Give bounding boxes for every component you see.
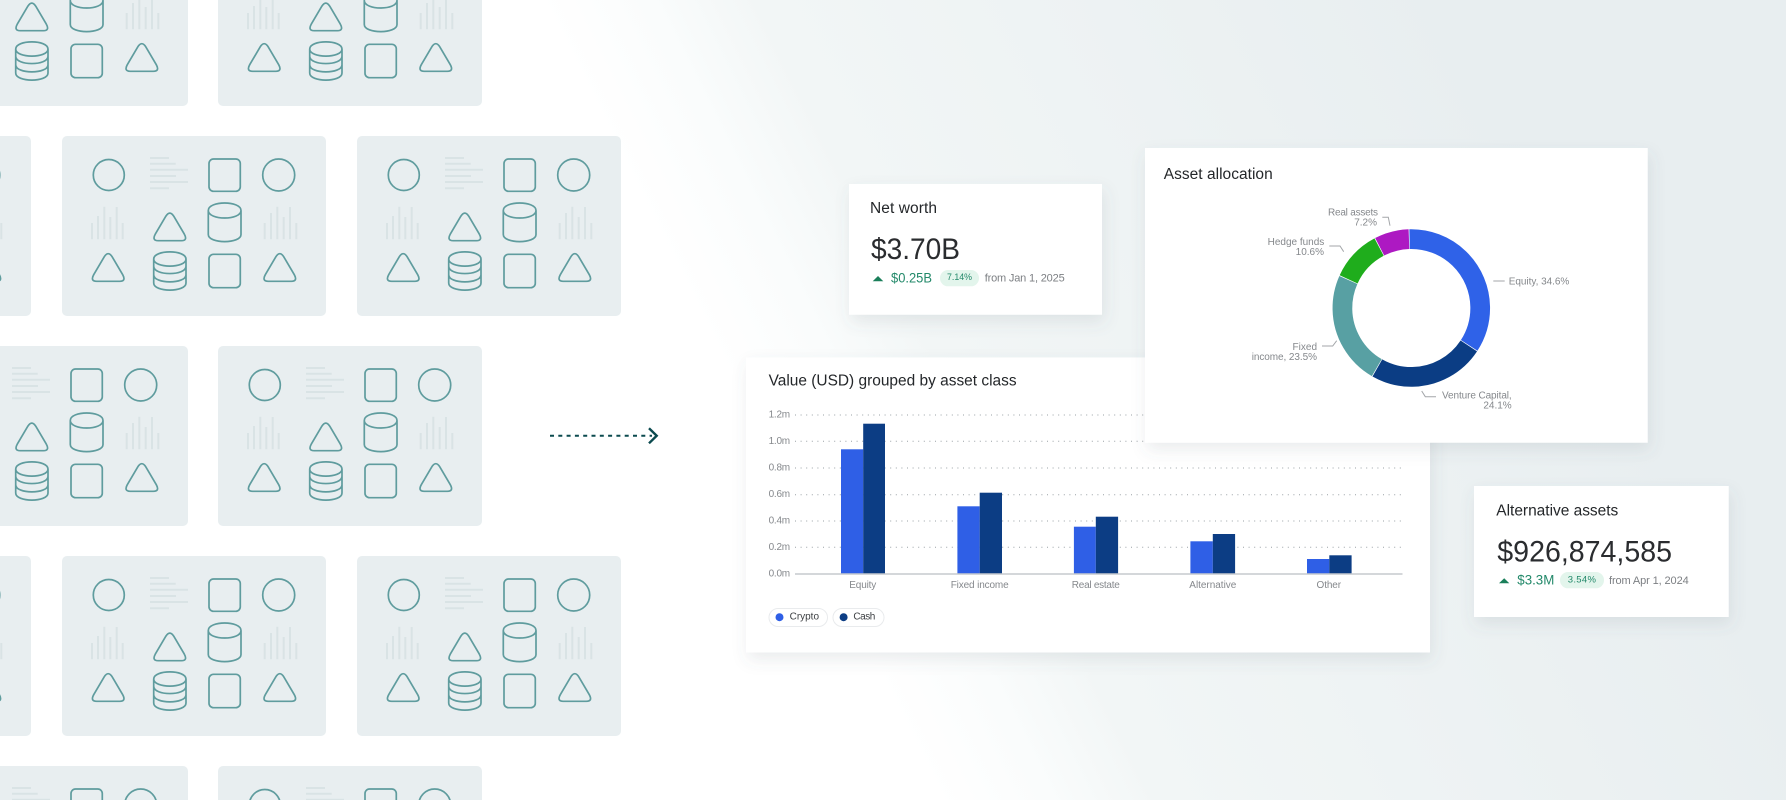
panel: value by asset class bar chart	[746, 358, 1430, 652]
tile: row 4 centre	[62, 556, 326, 736]
tile: row 3 right	[218, 346, 482, 526]
panel: grid of source data tiles	[0, 0, 621, 800]
change indicator: from Jan 1, 2025	[985, 273, 1065, 285]
x axis labels: Real estate	[1072, 580, 1120, 591]
change indicator: $0.25B	[891, 270, 932, 285]
heading: net worth: Net worth	[870, 200, 937, 217]
chart: grouped bars	[769, 410, 1402, 591]
change indicator: from Apr 1, 2024	[1609, 575, 1689, 587]
tile: row 1 left	[0, 0, 188, 106]
x axis labels: Other	[1317, 580, 1342, 591]
x axis labels	[849, 580, 1342, 591]
change indicator	[1499, 572, 1689, 588]
grid lines	[795, 415, 1402, 547]
y axis labels: 0.6m	[769, 489, 790, 500]
donut labels: Venture Capital,	[1442, 391, 1512, 402]
tile: row 2 cut off	[0, 136, 31, 316]
tile: row 2 centre	[62, 136, 326, 316]
panel: net worth card	[849, 184, 1102, 315]
heading: bar chart title: Value (USD) grouped by asset class	[769, 373, 1017, 390]
tile: row 1 right	[218, 0, 482, 106]
donut labels: Real assets	[1328, 208, 1378, 219]
change indicator: $3.3M	[1517, 573, 1554, 588]
tile: row 5 left	[0, 766, 188, 800]
donut labels: Equity, 34.6%	[1509, 277, 1569, 288]
y axis labels: 0.0m	[769, 568, 790, 580]
tile: row 4 cut off	[0, 556, 31, 736]
legend: crypto and cash	[769, 608, 884, 626]
legend: crypto and cash: Crypto	[790, 612, 819, 623]
panel: alternative assets card	[1474, 486, 1729, 617]
tile: row 3 left	[0, 346, 188, 526]
donut labels: 24.1%	[1483, 401, 1512, 412]
y axis labels: 1.2m	[769, 410, 790, 420]
donut labels: Hedge funds	[1268, 237, 1324, 248]
x axis labels: Equity	[849, 580, 876, 591]
x axis labels: Fixed income	[951, 580, 1009, 591]
panel: asset allocation donut	[1145, 148, 1648, 443]
change indicator: 7.14%	[947, 272, 973, 283]
heading: alternative assets: Alternative assets	[1496, 502, 1619, 519]
donut labels: 10.6%	[1296, 247, 1324, 258]
value: alternative assets: $926,874,585	[1497, 536, 1672, 569]
x axis labels: Alternative	[1189, 580, 1237, 591]
donut labels	[1252, 208, 1569, 412]
heading: asset allocation: Asset allocation	[1164, 166, 1273, 183]
tile: row 4 right	[357, 556, 621, 736]
tile: row 5 right	[218, 766, 482, 800]
donut labels: Fixed	[1293, 342, 1317, 353]
donut labels: 7.2%	[1354, 218, 1377, 229]
donut labels: income, 23.5%	[1252, 352, 1317, 363]
change indicator	[873, 270, 1065, 286]
y axis labels	[769, 410, 790, 580]
legend: crypto and cash: Cash	[853, 612, 875, 623]
chart: donut	[1341, 238, 1481, 378]
change indicator: 3.54%	[1568, 574, 1597, 585]
y axis labels: 0.8m	[769, 462, 790, 474]
y axis labels: 0.4m	[769, 516, 790, 526]
arrow: dashed arrow to dashboard	[550, 428, 657, 443]
y axis labels: 0.2m	[769, 542, 790, 553]
crypto bars	[841, 449, 1329, 574]
cash bars	[863, 424, 1352, 574]
tile: row 2 right	[357, 136, 621, 316]
value: net worth: $3.70B	[871, 233, 960, 266]
y axis labels: 1.0m	[769, 436, 790, 447]
